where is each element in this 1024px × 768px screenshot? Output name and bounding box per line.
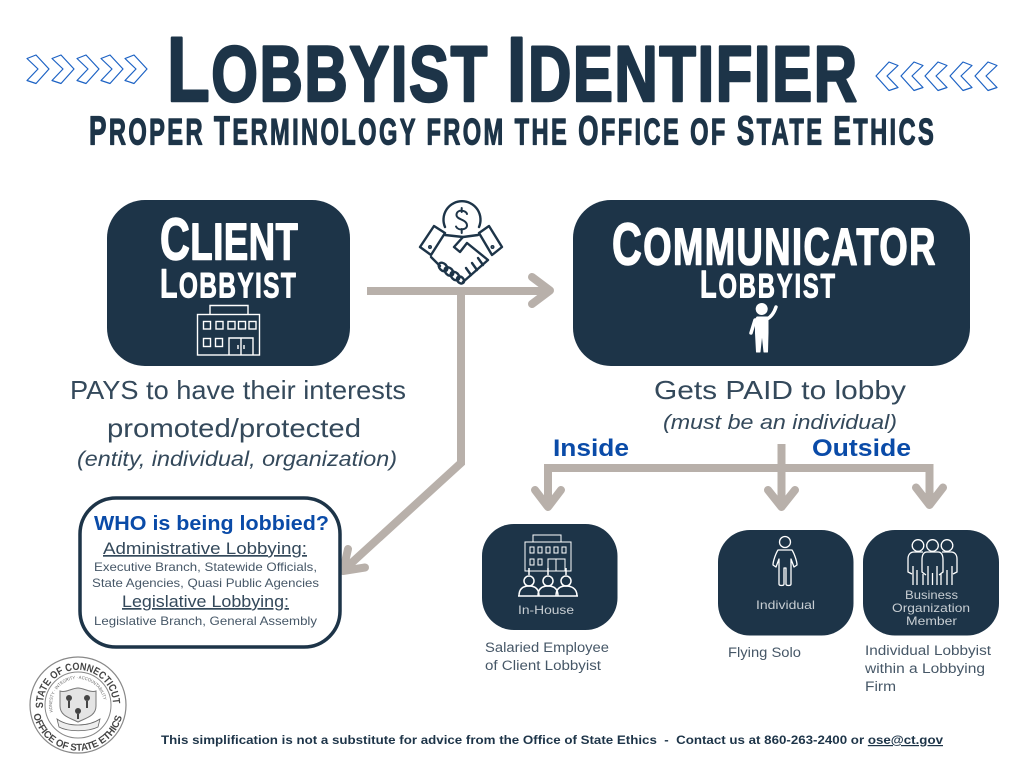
client description: PAYS to have their interests (70, 375, 406, 405)
seal inner motto: HONESTY · INTEGRITY · ACCOUNTABILITY (48, 676, 107, 712)
label: inside: Inside (553, 435, 629, 462)
icon: three people outline (908, 540, 957, 585)
seal bottom text: OFFICE OF STATE ETHICS (34, 714, 122, 751)
caption: in-house (485, 640, 609, 673)
panel: in-house (482, 524, 618, 630)
icon: person raising hand (751, 303, 776, 352)
client description: (entity, individual, organization) (77, 448, 397, 471)
title: LOBBYIST IDENTIFIER (167, 19, 857, 121)
icon: building with people (518, 535, 578, 596)
communicator subheading: LOBBYIST (700, 264, 835, 307)
caption: in-house: Salaried Employee (485, 640, 609, 655)
business label: Business (905, 588, 958, 602)
label: outside: Outside (812, 435, 911, 462)
icon: person outline (773, 536, 797, 586)
caption: business organization member (864, 643, 991, 694)
client heading: CLIENT (160, 206, 298, 272)
client description (70, 375, 406, 471)
panel: individual (718, 530, 854, 636)
legislative list: Legislative Branch, General Assembly (94, 614, 317, 628)
client subheading: LOBBYIST (160, 262, 296, 307)
arrows: lobbyist type tree (535, 444, 943, 507)
client description: promoted/protected (107, 413, 361, 443)
caption: in-house: of Client Lobbyist (485, 658, 601, 673)
communicator heading: COMMUNICATOR (612, 211, 935, 277)
communicator description (654, 375, 906, 434)
subtitle: PROPER TERMINOLOGY FROM THE OFFICE OF STATE ETHICS (89, 109, 934, 154)
caption: business organization member: within a Lobbying (864, 661, 985, 676)
footer disclaimer: This simplification is not a substitute for advice from the Office of State Ethics - Contact us at 860-263-2400 or ose@ct.gov (161, 733, 943, 747)
seal shield (60, 688, 96, 722)
panel: client lobbyist (107, 200, 350, 366)
icon: office building (198, 306, 260, 355)
panel: communicator lobbyist (573, 200, 970, 366)
caption: business organization member: Individual Lobbyist (865, 643, 991, 658)
icon: chevrons right (876, 62, 997, 90)
administrative list (92, 560, 319, 590)
business label: Organization (892, 601, 970, 615)
in-house label: In-House (518, 603, 574, 617)
who heading: WHO is being lobbied? (94, 513, 329, 535)
individual label: Individual (756, 598, 815, 612)
business label (892, 588, 970, 628)
arrow: client to communicator (367, 277, 550, 304)
icon: handshake with dollar (420, 201, 502, 285)
panel: business organization member (863, 530, 999, 636)
arrow: client to who is being lobbied (343, 295, 461, 571)
administrative lobbying: Administrative Lobbying: (103, 539, 307, 558)
administrative list: State Agencies, Quasi Public Agencies (92, 576, 319, 590)
communicator description: (must be an individual) (663, 412, 897, 434)
administrative list: Executive Branch, Statewide Officials, (94, 560, 317, 574)
panel: who is being lobbied (80, 498, 340, 647)
caption: individual: Flying Solo (728, 645, 801, 660)
caption: business organization member: Firm (865, 679, 896, 694)
seal top text: STATE OF CONNECTICUT (36, 662, 120, 708)
communicator description: Gets PAID to lobby (654, 375, 906, 405)
legislative lobbying: Legislative Lobbying: (122, 592, 289, 611)
seal: state of connecticut office of state ethics (29, 656, 127, 754)
icon: chevrons left (27, 55, 147, 84)
business label: Member (906, 614, 957, 628)
